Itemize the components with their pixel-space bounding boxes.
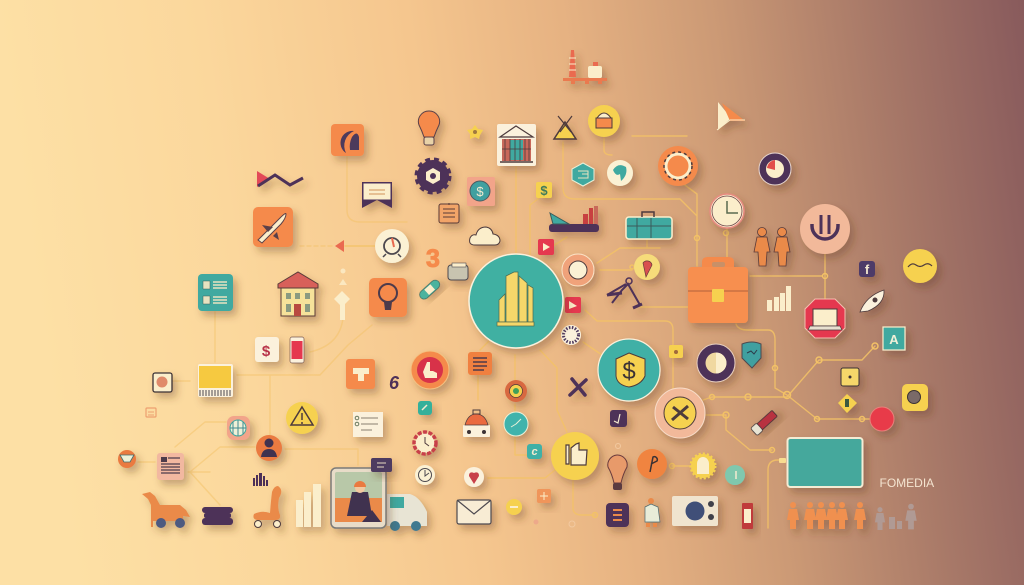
- panel: teal screen: [788, 438, 862, 487]
- icon: peach power circle: [800, 204, 850, 254]
- icon: pink document: [157, 453, 184, 480]
- icon: feather eye: [860, 290, 884, 312]
- icon: office chair: [253, 486, 281, 528]
- number six: 6: [389, 373, 400, 393]
- icon: marker pen: [751, 410, 778, 436]
- icon: red laptop badge: [805, 299, 845, 338]
- icon: small orange circle: [118, 450, 136, 468]
- icon: brain badge: [561, 325, 581, 345]
- icon: target ring: [759, 153, 791, 185]
- icon: dollar shield circle: $: [622, 358, 636, 385]
- icon: airplane square: [253, 207, 293, 247]
- icon: orange square with crescent: [331, 124, 364, 156]
- icon: red phone: [742, 503, 753, 529]
- icon: dollar coin square: [467, 177, 495, 206]
- brand label: FOMEDIA: [880, 476, 934, 490]
- icon: orange gear circle: [658, 146, 698, 186]
- chart: cream bar chart: [296, 484, 321, 527]
- icon: teal clock: [504, 412, 528, 436]
- icon: warning circle: [286, 402, 318, 434]
- icon: dollar tag: [536, 182, 552, 198]
- icon: two people: [754, 228, 790, 266]
- icon: purple donut: [697, 344, 735, 382]
- icon: white circle leaf: [607, 160, 633, 186]
- icon: orange briefcase: [688, 257, 748, 323]
- number three: 3: [426, 245, 440, 273]
- icon: yellow coin: [506, 499, 522, 515]
- icon: orange circle p: [637, 449, 667, 479]
- icon: zigzag arrow: [257, 171, 303, 187]
- icon: oil rig: [563, 50, 607, 84]
- icon: teal suitcase: [626, 212, 672, 239]
- icon: small framed badge: [153, 373, 172, 392]
- icon: orange plus tile: [537, 489, 551, 503]
- icon: dollar tag card: $: [262, 343, 271, 360]
- icon: speech banner: [362, 182, 392, 208]
- icon: bandage: [418, 278, 442, 301]
- icon: dark light bulb: [608, 455, 627, 490]
- icon: toaster: [448, 263, 468, 280]
- icon: small yellow tile: [669, 345, 683, 358]
- icon: yellow ring tile: [902, 384, 928, 411]
- icon: yellow wave circle: [903, 249, 937, 283]
- icon: hero building circle: [469, 254, 563, 348]
- icon: teal list: [198, 274, 233, 311]
- icon: purple gear: [416, 159, 450, 193]
- icon: hotel building: [278, 272, 318, 316]
- icon: purple tile j: [610, 410, 627, 427]
- icon: small teal tile: [418, 401, 432, 415]
- icon: yellow square tile: [841, 368, 859, 386]
- icon: small teal shield: [742, 342, 761, 368]
- icon: sun bell: [691, 454, 715, 478]
- icon: teal tile c: c: [531, 446, 538, 458]
- icon: yellow chip: [198, 364, 233, 397]
- icon: lab coat figure: [645, 498, 660, 527]
- people row: faded grey: [875, 504, 917, 530]
- icon: map pin circle: [634, 254, 660, 280]
- arrow: red marker: [335, 240, 344, 252]
- icon: dollar tag: $: [540, 183, 548, 198]
- icon: purple stack: [202, 507, 233, 525]
- icon: purple tile menu: [606, 503, 629, 527]
- icon: bank building: [497, 124, 536, 166]
- icon: camera: [672, 496, 718, 526]
- icon: yellow basket circle: [588, 105, 620, 137]
- icon: heart circle: [464, 467, 484, 487]
- icon: paper sail: [717, 102, 745, 130]
- icon: green ring: [505, 380, 527, 402]
- icon: crossed tools: [570, 379, 586, 395]
- icon: letter T tile: [346, 359, 375, 389]
- icon: red gear clock: [414, 432, 436, 454]
- icon: white clock: [415, 465, 435, 485]
- icon: salmon tools circle: [655, 388, 705, 438]
- icon: alarm clock: [375, 229, 409, 263]
- icon: red play button: [538, 239, 554, 255]
- icon: toy horse: [142, 492, 190, 528]
- icon: worker photo frame: [331, 468, 386, 528]
- icon: globe tile: [227, 416, 250, 440]
- icon: truck: [387, 494, 427, 531]
- icon: yellow diamond: [838, 394, 857, 413]
- icon: dollar tag card: [255, 337, 279, 362]
- connector network: [138, 136, 878, 528]
- icon: gauge ring: [562, 254, 594, 286]
- chart: dark mini bars: [253, 473, 268, 486]
- icon: mint circle: [725, 465, 745, 485]
- icon: teal tile c: [527, 444, 542, 459]
- icon: warning sign: [554, 116, 576, 139]
- icon: red dot: [870, 407, 894, 431]
- icon: plug on screen: [779, 458, 786, 463]
- icon: thumbs up circle: [551, 432, 599, 480]
- icon: letter A tile: A: [889, 332, 899, 347]
- icon: wall clock: [710, 194, 744, 228]
- icon: ship with chart: [549, 206, 599, 232]
- icon: dollar shield circle: [598, 339, 660, 401]
- icon: small yellow star: [467, 125, 483, 139]
- icon: light bulb: [418, 111, 440, 145]
- icon: keyhole pin with beads: [334, 268, 350, 320]
- icon: envelope: [457, 500, 491, 524]
- icon: phone: [290, 337, 304, 363]
- chart: cream bars: [767, 286, 791, 311]
- icon: speech tag: [371, 458, 392, 472]
- people row: orange: [787, 502, 866, 529]
- icon: teal hexagon: [572, 163, 594, 186]
- icon: hat robot: [463, 410, 490, 437]
- icon: facebook tile: [859, 261, 875, 277]
- icon: facebook tile: f: [865, 262, 870, 277]
- icon: bulb square: [369, 278, 407, 317]
- icon: letter A tile: [883, 327, 905, 350]
- icon: small red button: [565, 297, 581, 313]
- icon: pendulum: [607, 278, 642, 308]
- icon: person circle: [256, 435, 282, 461]
- icon: dollar coin square: $: [476, 184, 484, 199]
- icon: clipboard: [439, 203, 459, 223]
- icon: red hand circle: [411, 351, 449, 389]
- icon: faint document: [146, 408, 156, 417]
- icon: orange document tile: [468, 352, 492, 375]
- icon: cloud: [470, 227, 500, 245]
- icon: checklist note: [353, 412, 383, 437]
